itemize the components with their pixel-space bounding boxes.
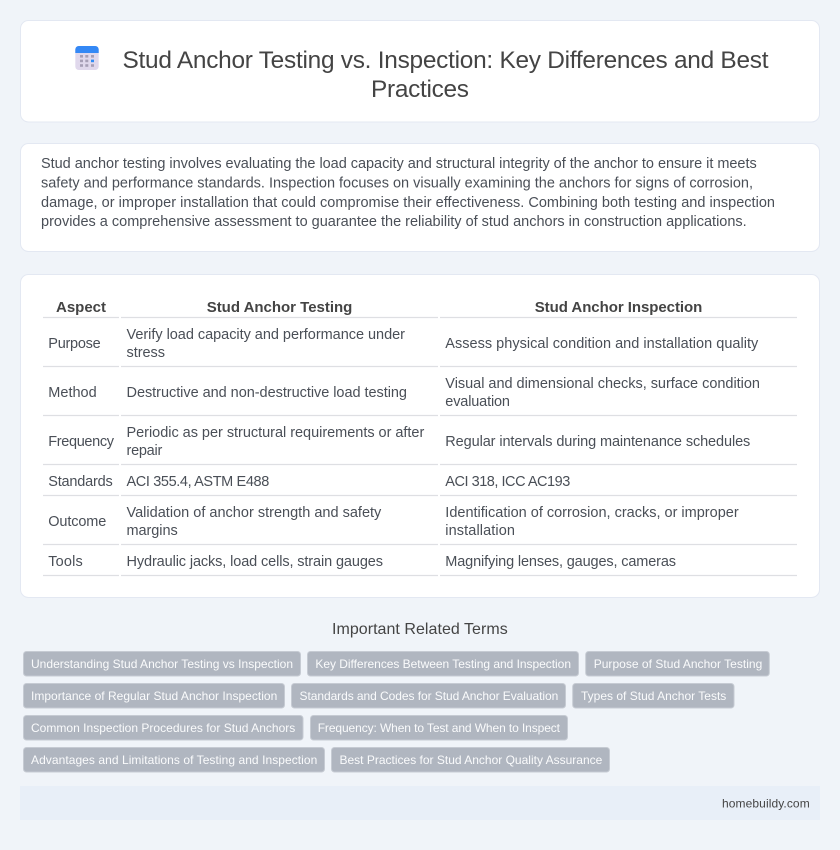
- table header row: [56, 299, 702, 316]
- row: outcome: Validation of anchor strength and safety: [126, 505, 382, 521]
- tag: Best Practices for Stud Anchor Quality Assurance: [340, 753, 603, 767]
- table header row: Stud Anchor Testing: [207, 299, 352, 316]
- row: standards: Standards: [48, 474, 113, 490]
- panel: introduction text: [20, 144, 820, 252]
- tag: Standards and Codes for Stud Anchor Evaluation: [300, 689, 558, 703]
- tag: Purpose of Stud Anchor Testing: [594, 657, 762, 671]
- title: Practices: [371, 76, 469, 103]
- tag: [573, 684, 734, 708]
- tag: [586, 652, 769, 676]
- intro paragraph: safety and performance standards. Inspection focuses on visually examining the anchors for signs of corrosion,: [41, 175, 753, 191]
- row: purpose: [48, 327, 759, 361]
- row: outcome: Identification of corrosion, cracks, or improper: [445, 505, 739, 521]
- tag: Frequency: When to Test and When to Inspect: [318, 721, 561, 735]
- panel: related term tags: [24, 652, 769, 772]
- row: outcome: margins: [126, 523, 178, 539]
- tag: Types of Stud Anchor Tests: [581, 689, 726, 703]
- tag: Advantages and Limitations of Testing and Inspection: [31, 753, 317, 767]
- row: method: Visual and dimensional checks, surface condition: [445, 376, 760, 392]
- tag: [332, 748, 610, 772]
- title: [122, 47, 769, 103]
- row: tools: Hydraulic jacks, load cells, strain gauges: [126, 554, 383, 570]
- row: outcome: Outcome: [48, 514, 106, 530]
- row: standards: ACI 318, ICC AC193: [445, 474, 570, 490]
- row: frequency: Frequency: [48, 434, 115, 450]
- tag: Importance of Regular Stud Anchor Inspection: [31, 689, 277, 703]
- intro paragraph: [41, 156, 775, 230]
- footer: [20, 786, 820, 820]
- tag: [24, 716, 303, 740]
- table header row: Stud Anchor Inspection: [535, 299, 702, 316]
- row: outcome: installation: [445, 523, 515, 539]
- row: frequency: repair: [126, 443, 162, 459]
- row: purpose: Purpose: [48, 336, 101, 352]
- row: outcome: [48, 505, 739, 539]
- title: Stud Anchor Testing vs. Inspection: Key Differences and Best: [122, 47, 769, 74]
- icon: calendar: [75, 46, 99, 70]
- row: purpose: Verify load capacity and performance under: [126, 327, 405, 343]
- row: tools: [48, 554, 676, 570]
- row: purpose: Assess physical condition and installation quality: [445, 336, 759, 352]
- footer site name: homebuildy.com: [722, 796, 810, 810]
- panel: comparison table: [20, 274, 820, 598]
- row: frequency: [48, 425, 750, 459]
- row: method: [48, 376, 760, 410]
- table header row: Aspect: [56, 299, 106, 316]
- tag: Understanding Stud Anchor Testing vs Inspection: [31, 657, 293, 671]
- row: tools: Tools: [48, 554, 83, 570]
- tag: [24, 652, 300, 676]
- tag: Key Differences Between Testing and Inspection: [315, 657, 571, 671]
- row: standards: [48, 474, 570, 490]
- row: frequency: Periodic as per structural requirements or after: [126, 425, 424, 441]
- row: method: Method: [48, 385, 97, 401]
- row: tools: Magnifying lenses, gauges, cameras: [445, 554, 676, 570]
- tag: [24, 748, 324, 772]
- row: standards: ACI 355.4, ASTM E488: [126, 474, 269, 490]
- row: frequency: Regular intervals during maintenance schedules: [445, 434, 750, 450]
- intro paragraph: damage, or improper installation that could compromise their effectiveness. Combining both testing and inspection: [41, 195, 775, 211]
- row: purpose: stress: [126, 345, 165, 361]
- row: method: evaluation: [445, 394, 510, 410]
- intro paragraph: provides a comprehensive assessment to guarantee the reliability of stud anchors in construction applications.: [41, 214, 747, 230]
- tag: Common Inspection Procedures for Stud Anchors: [31, 721, 295, 735]
- tag: [310, 716, 568, 740]
- tag: [292, 684, 566, 708]
- row: method: Destructive and non-destructive load testing: [126, 385, 407, 401]
- panel: header: [20, 20, 820, 122]
- tag: [308, 652, 578, 676]
- tag: [24, 684, 284, 708]
- intro paragraph: Stud anchor testing involves evaluating the load capacity and structural integrity of the anchor to ensure it meets: [41, 156, 757, 172]
- heading: important related terms: Important Related Terms: [332, 621, 508, 638]
